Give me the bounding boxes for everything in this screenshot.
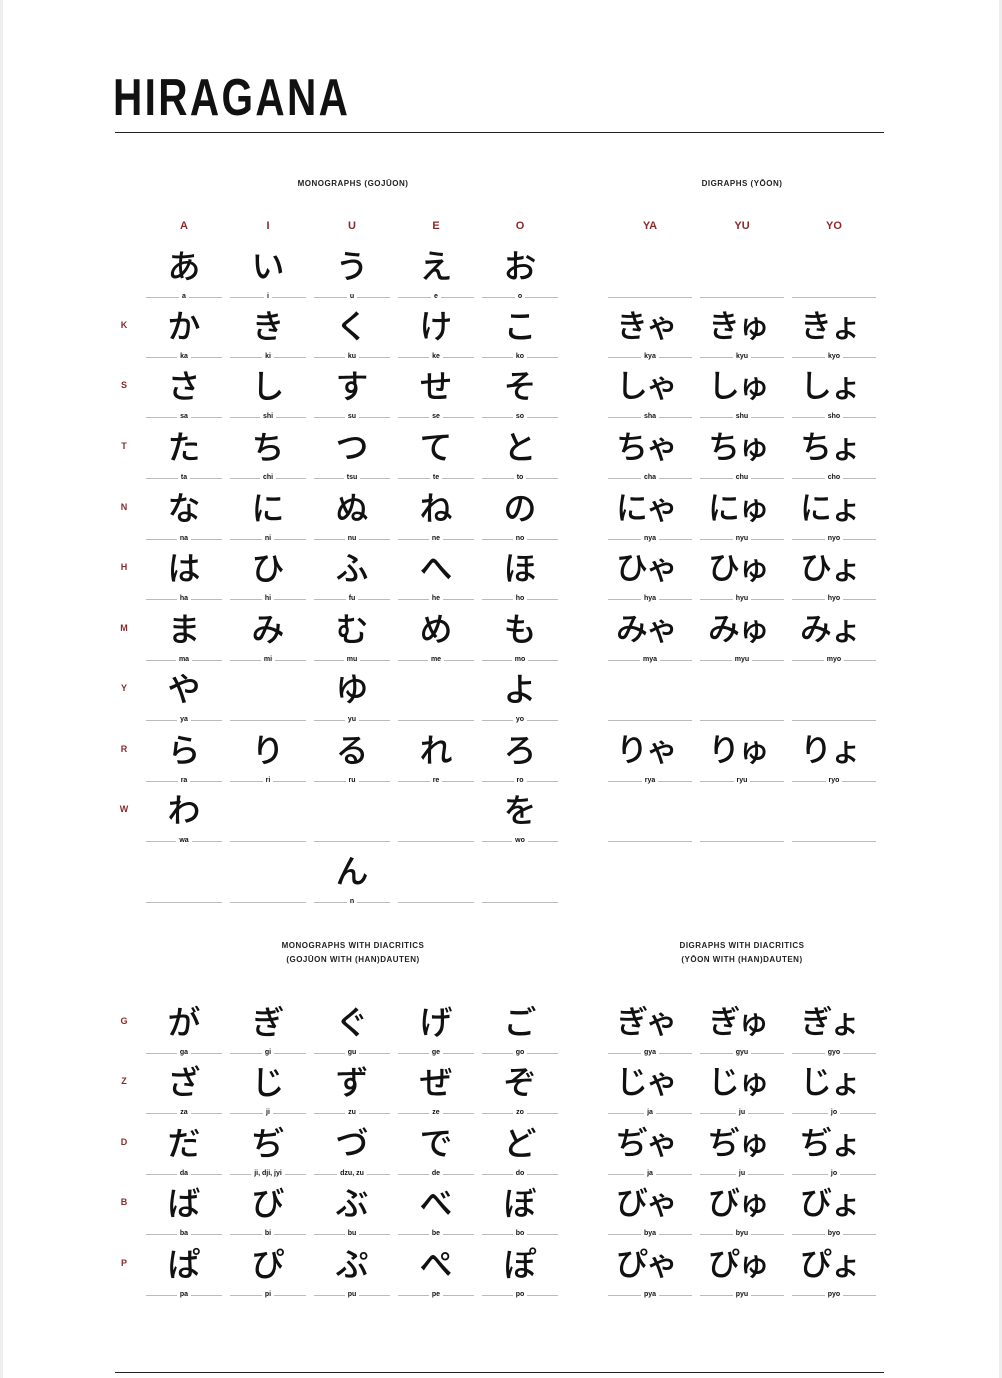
row: K: kya: [644, 353, 656, 360]
row: D: ぢゃ: [616, 1118, 676, 1164]
row: Z: じゃ: [616, 1057, 676, 1103]
row: D: do: [516, 1170, 524, 1177]
row: R: R: [121, 744, 127, 754]
row: R: [121, 724, 876, 784]
row: H: ふ: [336, 542, 368, 590]
row: S: S: [121, 380, 127, 390]
row: M: み: [252, 603, 284, 651]
row: N: ni: [265, 535, 271, 542]
row: D: で: [420, 1117, 452, 1165]
row: H: ひゃ: [616, 543, 676, 589]
row: Z: じょ: [800, 1057, 860, 1103]
row: M: も: [504, 603, 536, 651]
row: S: sho: [828, 413, 840, 420]
row: vowels: e: [434, 293, 438, 300]
row: S: shu: [736, 413, 748, 420]
row: H: ひ: [252, 542, 284, 590]
row: S: さ: [168, 360, 200, 408]
row: Y: ゆ: [336, 663, 368, 711]
row: T: ちゃ: [616, 422, 676, 468]
row: Y: yo: [516, 716, 524, 723]
row: N: nyu: [736, 535, 748, 542]
row: G: ぎ: [252, 996, 284, 1044]
row: B: びょ: [800, 1178, 860, 1224]
row: N: にゃ: [616, 483, 676, 529]
row: G: ge: [432, 1049, 440, 1056]
row: W: [120, 784, 876, 844]
row: R: ra: [181, 777, 187, 784]
row: N: nyo: [828, 535, 840, 542]
row: G: げ: [420, 996, 452, 1044]
row: G: G: [120, 1016, 128, 1026]
row: vowels: あ: [168, 240, 200, 288]
row: K: ka: [180, 353, 188, 360]
row: Z: ぞ: [504, 1056, 536, 1104]
row: B: bo: [516, 1230, 524, 1237]
row: M: mya: [643, 656, 657, 663]
row: Z: Z: [121, 1076, 127, 1086]
row: W: wo: [515, 837, 525, 844]
row: R: ri: [266, 777, 270, 784]
column headers: YU: [734, 220, 750, 232]
row: n: ん: [336, 845, 368, 893]
row: K: け: [420, 300, 452, 348]
row: H: ha: [180, 595, 188, 602]
row: B: bi: [265, 1230, 271, 1237]
row: D: da: [180, 1170, 188, 1177]
row: B: bya: [644, 1230, 656, 1237]
row: N: な: [168, 482, 200, 530]
row: B: べ: [420, 1177, 452, 1225]
row: G: が: [168, 996, 200, 1044]
row: Z: jo: [831, 1109, 837, 1116]
row: G: gyu: [736, 1049, 748, 1056]
row: B: [121, 1177, 876, 1237]
row: Z: ze: [432, 1109, 440, 1116]
row: H: hyo: [828, 595, 840, 602]
row: B: byo: [828, 1230, 840, 1237]
row: T: ち: [252, 421, 284, 469]
row: P: po: [516, 1291, 524, 1298]
row: H: は: [168, 542, 200, 590]
row: H: ho: [516, 595, 524, 602]
row: K: kyo: [828, 353, 840, 360]
row: T: cho: [828, 474, 840, 481]
row: S: せ: [420, 360, 452, 408]
row: G: ぎゃ: [616, 997, 676, 1043]
heading: monographs with diacritics: [282, 941, 424, 964]
row: W: わ: [168, 784, 200, 832]
row: M: ma: [179, 656, 189, 663]
row: Z: ji: [266, 1109, 270, 1116]
row: Z: じゅ: [708, 1057, 768, 1103]
row: P: pyo: [828, 1291, 840, 1298]
row: K: く: [336, 300, 368, 348]
row: B: びゅ: [708, 1178, 768, 1224]
row: D: ju: [739, 1170, 745, 1177]
column headers: U: [348, 220, 356, 232]
row: R: re: [433, 777, 439, 784]
row: S: しょ: [800, 361, 860, 407]
row: G: [120, 996, 876, 1056]
row: T: te: [433, 474, 439, 481]
row: Z: za: [180, 1109, 188, 1116]
row: S: sha: [644, 413, 656, 420]
row: N: nya: [644, 535, 656, 542]
row: vowels: い: [252, 240, 284, 288]
row: B: B: [121, 1197, 127, 1207]
row: N: no: [516, 535, 524, 542]
row: H: he: [432, 595, 440, 602]
heading: digraphs: DIGRAPHS (YŌON): [702, 179, 782, 188]
row: S: しゃ: [616, 361, 676, 407]
row: T: た: [168, 421, 200, 469]
column headers: O: [516, 220, 524, 232]
row: S: sa: [180, 413, 188, 420]
row: R: る: [336, 724, 368, 772]
row: K: ki: [265, 353, 271, 360]
column headers: YO: [826, 220, 842, 232]
row: vowels: [146, 240, 876, 300]
row: H: fu: [349, 595, 355, 602]
heading: digraphs with diacritics: (YŌON WITH (HAN)DAUTEN): [681, 955, 803, 964]
row: vowels: う: [336, 240, 368, 288]
row: B: ba: [180, 1230, 188, 1237]
row: G: ぎゅ: [708, 997, 768, 1043]
row: D: ぢ: [252, 1117, 284, 1165]
row: Z: ja: [647, 1109, 653, 1116]
row: R: ro: [516, 777, 524, 784]
row: n: n: [350, 898, 354, 905]
row: Y: ya: [180, 716, 188, 723]
row: P: ぴ: [252, 1238, 284, 1286]
row: K: kyu: [736, 353, 748, 360]
row: D: だ: [168, 1117, 200, 1165]
row: M: myo: [827, 656, 841, 663]
row: P: ぴょ: [800, 1239, 860, 1285]
heading: digraphs with diacritics: [680, 941, 804, 964]
row: n: [146, 845, 558, 905]
row: K: ku: [348, 353, 356, 360]
row: W: を: [504, 784, 536, 832]
row: K: こ: [504, 300, 536, 348]
heading: monographs: MONOGRAPHS (GOJŪON): [298, 179, 408, 188]
row: G: gyo: [828, 1049, 840, 1056]
row: T: ちゅ: [708, 422, 768, 468]
row: B: ぼ: [504, 1177, 536, 1225]
row: T: to: [517, 474, 523, 481]
row: D: jo: [831, 1170, 837, 1177]
row: D: D: [121, 1137, 127, 1147]
row: vowels: o: [518, 293, 522, 300]
row: M: M: [120, 623, 128, 633]
row: Z: ざ: [168, 1056, 200, 1104]
row: B: be: [432, 1230, 440, 1237]
row: T: と: [504, 421, 536, 469]
row: N: N: [121, 502, 127, 512]
row: R: ryu: [737, 777, 747, 784]
row: K: き: [252, 300, 284, 348]
row: P: ぴゅ: [708, 1239, 768, 1285]
row: vowels: i: [267, 293, 269, 300]
row: G: go: [516, 1049, 524, 1056]
row: W: wa: [179, 837, 189, 844]
row: G: gi: [265, 1049, 271, 1056]
row: P: ぷ: [336, 1238, 368, 1286]
row: H: [121, 542, 876, 602]
row: Z: zu: [348, 1109, 356, 1116]
row: W: W: [120, 804, 128, 814]
row: P: pi: [265, 1291, 271, 1298]
row: P: [121, 1238, 876, 1298]
row: D: ぢゅ: [708, 1118, 768, 1164]
row: K: [121, 300, 876, 360]
row: R: ろ: [504, 724, 536, 772]
row: S: su: [348, 413, 356, 420]
row: T: cha: [644, 474, 656, 481]
row: T: [121, 421, 876, 481]
row: N: na: [180, 535, 188, 542]
row: R: り: [252, 724, 284, 772]
row: P: ぽ: [504, 1238, 536, 1286]
row: D: づ: [336, 1117, 368, 1165]
row: S: shi: [263, 413, 273, 420]
row: D: ja: [647, 1170, 653, 1177]
row: B: びゃ: [616, 1178, 676, 1224]
row: N: にゅ: [708, 483, 768, 529]
row: Z: [121, 1056, 876, 1116]
row: N: に: [252, 482, 284, 530]
row: S: しゅ: [708, 361, 768, 407]
row: B: び: [252, 1177, 284, 1225]
row: K: か: [168, 300, 200, 348]
row: vowels: え: [420, 240, 452, 288]
row: D: dzu, zu: [340, 1170, 364, 1177]
row: R: ら: [168, 724, 200, 772]
row: Z: zo: [516, 1109, 524, 1116]
row: H: hya: [644, 595, 656, 602]
column headers: E: [432, 220, 440, 232]
row: G: ぐ: [336, 996, 368, 1044]
row: R: りょ: [800, 725, 860, 771]
row: S: そ: [504, 360, 536, 408]
column headers: A: [180, 220, 188, 232]
row: T: chu: [736, 474, 748, 481]
row: B: ば: [168, 1177, 200, 1225]
row: S: [121, 360, 876, 420]
row: H: ひゅ: [708, 543, 768, 589]
row: N: ぬ: [336, 482, 368, 530]
row: M: mo: [515, 656, 525, 663]
row: T: つ: [336, 421, 368, 469]
row: G: gya: [644, 1049, 656, 1056]
row: M: [120, 603, 876, 663]
row: D: de: [432, 1170, 440, 1177]
heading: monographs with diacritics: (GOJŪON WITH (HAN)DAUTEN): [286, 955, 420, 964]
row: P: ぱ: [168, 1238, 200, 1286]
row: P: pyu: [736, 1291, 748, 1298]
column headers: [180, 220, 842, 232]
row: N: の: [504, 482, 536, 530]
row: Y: [121, 663, 876, 723]
row: Z: じ: [252, 1056, 284, 1104]
row: Y: Y: [121, 683, 127, 693]
row: K: きょ: [800, 301, 860, 347]
row: H: へ: [420, 542, 452, 590]
row: N: ね: [420, 482, 452, 530]
row: Y: や: [168, 663, 200, 711]
row: K: きゃ: [616, 301, 676, 347]
row: M: me: [431, 656, 441, 663]
row: G: gu: [348, 1049, 356, 1056]
row: Z: ju: [739, 1109, 745, 1116]
row: M: mi: [264, 656, 272, 663]
row: R: りゅ: [708, 725, 768, 771]
heading: monographs with diacritics: MONOGRAPHS WITH DIACRITICS: [282, 941, 424, 950]
row: N: [121, 482, 876, 542]
row: K: K: [121, 320, 127, 330]
row: S: so: [516, 413, 524, 420]
row: K: ke: [432, 353, 440, 360]
row: T: chi: [263, 474, 273, 481]
row: P: pa: [180, 1291, 188, 1298]
row: M: ま: [168, 603, 200, 651]
row: D: ぢょ: [800, 1118, 860, 1164]
row: H: H: [121, 562, 127, 572]
row: K: きゅ: [708, 301, 768, 347]
row: R: ryo: [829, 777, 839, 784]
row: P: ぺ: [420, 1238, 452, 1286]
row: B: bu: [348, 1230, 356, 1237]
title: HIRAGANA: [113, 69, 350, 127]
row: R: ru: [348, 777, 356, 784]
row: H: ほ: [504, 542, 536, 590]
row: P: pu: [348, 1291, 356, 1298]
heading: digraphs with diacritics: DIGRAPHS WITH DIACRITICS: [680, 941, 804, 950]
row: T: て: [420, 421, 452, 469]
row: T: ちょ: [800, 422, 860, 468]
row: R: れ: [420, 724, 452, 772]
row: P: ぴゃ: [616, 1239, 676, 1285]
row: M: みゃ: [616, 604, 676, 650]
row: H: hyu: [736, 595, 748, 602]
row: N: にょ: [800, 483, 860, 529]
row: T: T: [121, 441, 127, 451]
row: S: se: [432, 413, 440, 420]
row: B: byu: [736, 1230, 748, 1237]
row: M: みゅ: [708, 604, 768, 650]
row: P: pe: [432, 1291, 440, 1298]
row: P: P: [121, 1258, 127, 1268]
row: G: ぎょ: [801, 997, 859, 1043]
row: R: rya: [645, 777, 655, 784]
row: Y: よ: [504, 663, 536, 711]
row: D: ji, dji, jyi: [254, 1170, 282, 1177]
row: B: ぶ: [336, 1177, 368, 1225]
row: M: む: [336, 603, 368, 651]
row: M: myu: [735, 656, 749, 663]
row: T: tsu: [347, 474, 357, 481]
row: vowels: a: [182, 293, 186, 300]
row: D: ど: [504, 1117, 536, 1165]
row: N: ne: [432, 535, 440, 542]
row: K: ko: [516, 353, 524, 360]
row: S: し: [252, 360, 284, 408]
row: Z: ず: [336, 1056, 368, 1104]
row: H: ひょ: [800, 543, 860, 589]
row: vowels: u: [350, 293, 354, 300]
row: M: みょ: [800, 604, 860, 650]
row: S: す: [336, 360, 368, 408]
row: M: め: [420, 603, 452, 651]
row: D: [121, 1117, 876, 1177]
row: G: ga: [180, 1049, 188, 1056]
column headers: YA: [643, 220, 657, 232]
row: T: ta: [181, 474, 187, 481]
row: Z: ぜ: [420, 1056, 452, 1104]
row: Y: yu: [348, 716, 356, 723]
row: N: nu: [348, 535, 356, 542]
row: P: pya: [644, 1291, 656, 1298]
column headers: I: [266, 220, 270, 232]
row: M: mu: [347, 656, 357, 663]
row: H: hi: [265, 595, 271, 602]
row: R: りゃ: [616, 725, 676, 771]
row: vowels: お: [504, 240, 536, 288]
row: G: ご: [504, 996, 536, 1044]
